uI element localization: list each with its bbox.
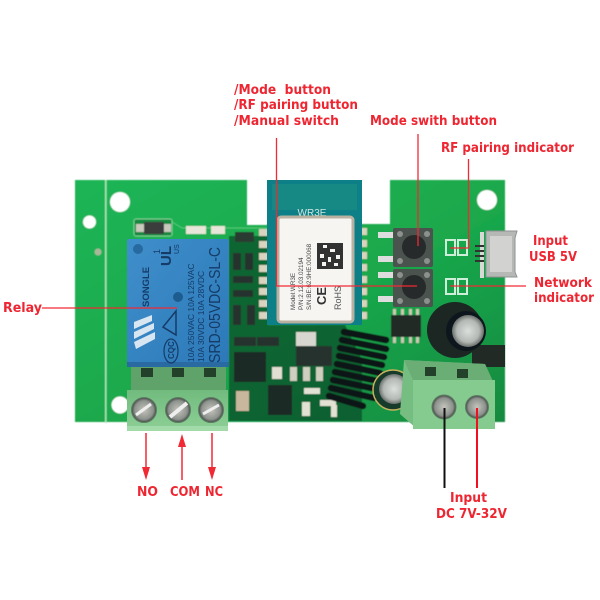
large capacitor bbox=[427, 302, 505, 367]
relay markings: 10A 30VDC 10A 28VDC bbox=[196, 271, 206, 362]
relay markings: SRD-05VDC-SL-C bbox=[207, 247, 224, 363]
mode switch leader bbox=[417, 134, 419, 246]
relay leader bbox=[42, 307, 177, 309]
arrow: NC bbox=[208, 433, 216, 480]
leader lines bbox=[42, 134, 526, 488]
label: manual switch: /Manual switch bbox=[234, 114, 339, 129]
dark central components area bbox=[229, 236, 362, 421]
right side parts bbox=[373, 228, 517, 429]
label: network indicator bbox=[534, 276, 595, 306]
relay markings: UL bbox=[158, 246, 175, 266]
antenna board bbox=[267, 180, 362, 325]
label: relay: Relay bbox=[3, 301, 43, 316]
label: RF pairing button: /RF pairing button bbox=[234, 98, 358, 113]
WiFi module bbox=[267, 180, 362, 325]
label: input USB: Input bbox=[533, 234, 568, 249]
QR code bbox=[317, 243, 343, 269]
label: mode button: /Mode button bbox=[234, 83, 331, 98]
labels bbox=[3, 83, 595, 522]
label: input DC: DC 7V-32V bbox=[436, 507, 507, 522]
input terminal connector bbox=[400, 360, 495, 429]
network indicator leader bbox=[450, 285, 526, 287]
micro USB port bbox=[475, 231, 517, 278]
label: mode swith button: Mode swith button bbox=[370, 114, 497, 129]
label: RF pairing indicator: RF pairing indicator bbox=[441, 141, 575, 156]
RoHS mark: RoHS bbox=[333, 286, 343, 310]
relay markings: 1 bbox=[152, 249, 162, 254]
relay body bbox=[127, 239, 229, 367]
regulator bbox=[296, 346, 332, 366]
mounting holes bbox=[83, 190, 497, 414]
label: NC: NC bbox=[205, 485, 223, 500]
label: input DC: Input bbox=[450, 491, 487, 506]
LED indicators bbox=[446, 240, 467, 294]
circuit board bbox=[75, 180, 505, 423]
module label bbox=[290, 243, 313, 310]
manual switch button bbox=[378, 269, 433, 307]
arrow: COM bbox=[178, 434, 186, 480]
black IC near capacitor bbox=[391, 315, 421, 337]
panel: green PCB bbox=[75, 180, 505, 422]
label: network indicator: Network bbox=[534, 276, 592, 291]
antenna coil bbox=[329, 332, 386, 406]
wire: black negative bbox=[444, 408, 446, 488]
label: input DC bbox=[436, 491, 507, 522]
relay markings: SONGLE bbox=[141, 267, 152, 307]
RF pairing leader bbox=[450, 159, 468, 248]
module label: S/N:BE:62:9HE:000068 bbox=[306, 243, 313, 310]
relay bbox=[127, 239, 229, 431]
manual switch leader bbox=[276, 138, 417, 286]
SMD pads beside module bbox=[259, 228, 367, 319]
relay markings: CQC bbox=[167, 341, 176, 359]
screws bbox=[132, 398, 156, 422]
mode button bbox=[378, 228, 433, 267]
arrow: NO bbox=[142, 433, 150, 480]
small capacitor bbox=[373, 370, 413, 410]
label: COM: COM bbox=[170, 485, 200, 500]
module label: P/N:2.12.03.02194 bbox=[298, 257, 305, 310]
diode bbox=[134, 219, 172, 236]
CE mark: CE bbox=[314, 287, 329, 305]
label: NO: NO bbox=[137, 485, 158, 500]
module label: Model:WR3E bbox=[290, 273, 297, 310]
label: input USB: USB 5V bbox=[529, 250, 577, 265]
relay terminal connector bbox=[127, 366, 228, 431]
metal shield bbox=[278, 217, 353, 322]
relay markings: 10A 250VAC 10A 125VAC bbox=[186, 264, 196, 362]
relay markings: US bbox=[174, 244, 181, 254]
label: network indicator: indicator bbox=[534, 291, 595, 306]
relay markings bbox=[134, 244, 224, 363]
module name: WR3E bbox=[298, 208, 327, 219]
wire: red positive bbox=[476, 408, 478, 488]
label: input USB bbox=[529, 234, 577, 265]
